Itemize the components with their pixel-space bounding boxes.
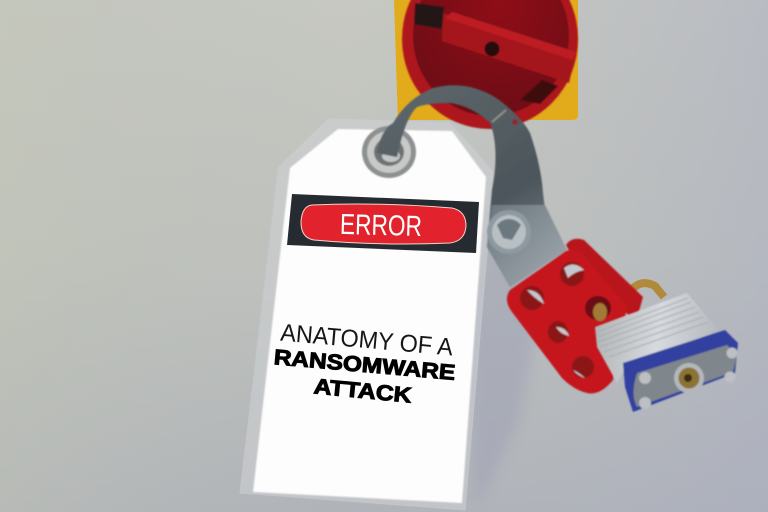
title xyxy=(273,320,456,408)
title line 3: ATTACK xyxy=(313,374,413,408)
icon: padlock shackle xyxy=(630,283,664,297)
keyhole xyxy=(674,363,704,393)
error label: ERROR xyxy=(340,209,422,243)
icon: steel hasp hook xyxy=(377,85,567,287)
tag sleeve xyxy=(240,118,494,510)
icon: red lockout hasp xyxy=(507,239,643,393)
icon: padlock body xyxy=(595,293,738,412)
bolt xyxy=(487,210,531,254)
title line 2: RANSOMWARE xyxy=(273,345,456,385)
shadow beside tag xyxy=(465,190,545,512)
red error pill xyxy=(301,204,466,244)
tag card xyxy=(253,129,486,503)
error banner xyxy=(287,194,479,253)
title line 1: ANATOMY OF A xyxy=(279,320,455,362)
icon: yellow switch plate xyxy=(394,0,578,124)
icon: red rotary switch xyxy=(402,0,578,129)
icon: eyelet xyxy=(362,126,416,178)
rivets xyxy=(639,372,651,384)
